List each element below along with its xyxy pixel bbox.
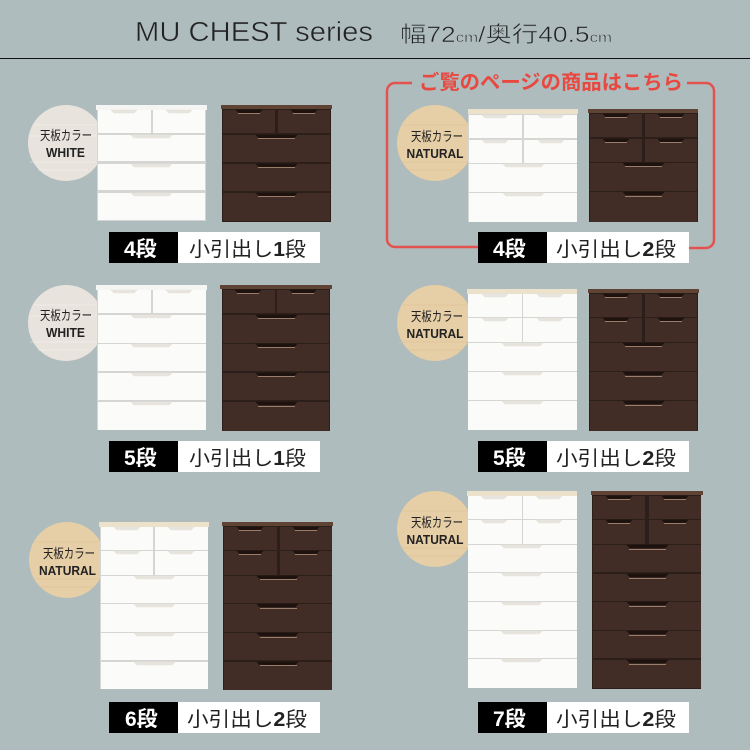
label: 5 tiers, 2 small drawers: 小引出し 2段 bbox=[556, 447, 676, 470]
colour swatch: natural, 6 tiers: NATURAL bbox=[39, 563, 96, 578]
label: 5 tiers, 2 small drawers bbox=[478, 441, 689, 472]
chest: white 4 tiers bbox=[96, 105, 207, 221]
label: 4 tiers, 1 small drawer: 小引出し1段 bbox=[189, 238, 306, 261]
chest: white 5 tiers 2 small bbox=[467, 289, 577, 430]
chest: brown 7 tiers bbox=[591, 491, 703, 689]
label: 5 tiers, 2 small drawers: 5段 bbox=[493, 447, 526, 470]
colour swatch: white, 5 tiers: 天板カラー bbox=[40, 308, 92, 323]
chest: white 7 tiers bbox=[467, 491, 577, 688]
highlight frame bbox=[387, 83, 714, 248]
highlight heading: ご覧のページの商品はこちら bbox=[419, 70, 683, 94]
label: 6 tiers, 2 small drawers: 小引出し 2段 bbox=[187, 708, 307, 731]
colour swatch: natural, 5 tiers: NATURAL bbox=[406, 326, 464, 341]
label: 7 tiers, 2 small drawers bbox=[478, 702, 689, 733]
title: MU CHEST series bbox=[135, 16, 373, 47]
label: 7 tiers, 2 small drawers: 小引出し 2段 bbox=[556, 708, 676, 731]
label: 4 tiers, 1 small drawer: 4段 bbox=[124, 238, 157, 261]
colour swatch: natural, 7 tiers: 天板カラー bbox=[411, 515, 463, 530]
chest: brown 5 tiers 2 small bbox=[588, 289, 699, 431]
label: 4 tiers, 2 small drawers: 小引出し 2段 bbox=[556, 238, 676, 261]
colour swatch: white, 4 tiers: WHITE bbox=[46, 145, 85, 160]
label: 4 tiers, 1 small drawer bbox=[109, 232, 320, 263]
dimensions text: 幅72 cm/奥行40.5 cm bbox=[400, 22, 612, 47]
colour swatch: white, 5 tiers: WHITE bbox=[46, 325, 85, 340]
colour swatch: white, 4 tiers: 天板カラー bbox=[40, 128, 92, 143]
colour swatch: natural, 5 tiers bbox=[397, 285, 473, 361]
colour swatch: natural, 4 tiers: 天板カラー bbox=[411, 129, 463, 144]
label: 4 tiers, 2 small drawers: 4段 bbox=[493, 238, 526, 261]
label: 4 tiers, 2 small drawers bbox=[478, 232, 689, 263]
chest: brown 4 tiers 2 small bbox=[588, 109, 698, 222]
colour swatch: natural, 6 tiers: 天板カラー bbox=[43, 546, 95, 561]
chest: brown 6 tiers bbox=[222, 522, 333, 690]
chest: brown 5 tiers bbox=[220, 285, 332, 431]
colour swatch: natural, 4 tiers: NATURAL bbox=[406, 146, 464, 161]
chest: white 4 tiers 2 small bbox=[468, 109, 578, 222]
colour swatch: natural, 6 tiers bbox=[29, 522, 105, 598]
label: 7 tiers, 2 small drawers: 7段 bbox=[493, 708, 526, 731]
colour swatch: natural, 5 tiers: 天板カラー bbox=[411, 309, 463, 324]
label: 5 tiers, 1 small drawer: 小引出し1段 bbox=[189, 447, 306, 470]
colour swatch: natural, 7 tiers bbox=[397, 491, 473, 567]
chest: white 5 tiers bbox=[96, 285, 207, 430]
chest: white 6 tiers bbox=[99, 522, 209, 689]
colour swatch: white, 5 tiers bbox=[28, 285, 104, 361]
label: 6 tiers, 2 small drawers bbox=[109, 702, 320, 733]
label: 6 tiers, 2 small drawers: 6段 bbox=[125, 708, 158, 731]
label: 5 tiers, 1 small drawer: 5段 bbox=[124, 447, 157, 470]
chest: brown 4 tiers bbox=[221, 105, 332, 222]
colour swatch: natural, 4 tiers bbox=[397, 105, 473, 181]
label: 5 tiers, 1 small drawer bbox=[109, 441, 320, 472]
colour swatch: natural, 7 tiers: NATURAL bbox=[406, 532, 464, 547]
colour swatch: white, 4 tiers bbox=[28, 105, 104, 181]
